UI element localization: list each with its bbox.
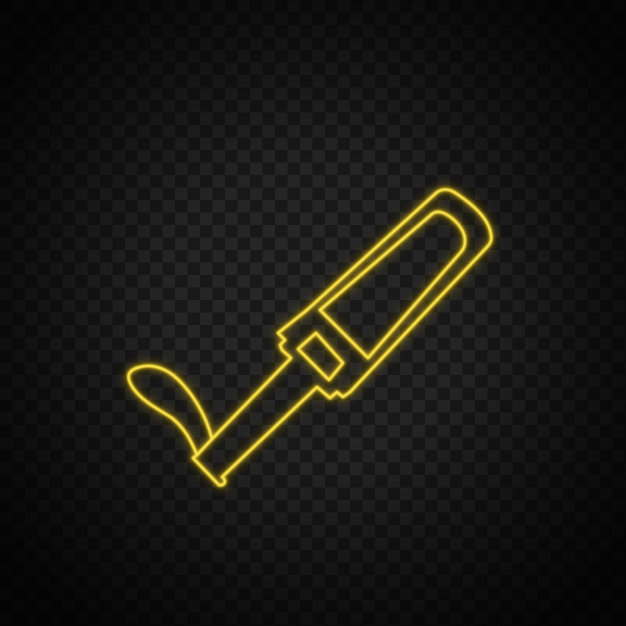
outer glow bbox=[129, 190, 491, 485]
icon: hacksaw neon line bbox=[129, 190, 491, 485]
near glow bbox=[129, 190, 491, 485]
